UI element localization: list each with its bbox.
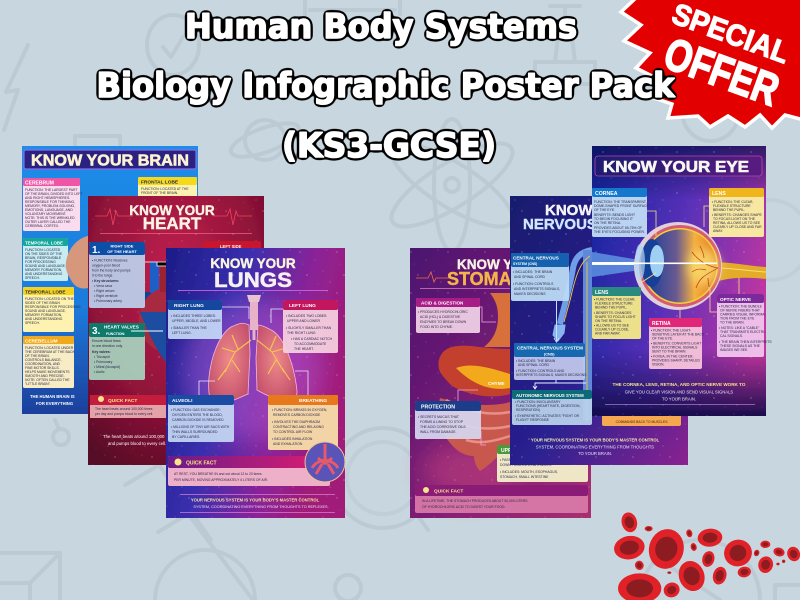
box: cerebrum <box>23 178 83 231</box>
lungs title <box>178 256 328 292</box>
box: cerebrum: NOTE: THIS IS THE WRINKLED <box>25 216 75 220</box>
quick fact: stomach <box>415 485 588 513</box>
box: central nervous system top: • INCLUDES: THE BRAIN <box>513 270 553 274</box>
box: upper digestive: • INCLUDES: MOUTH, ESOPHAGUS, <box>500 470 558 474</box>
box: frontal lobe: FUNCTION: LOCATED AT THE <box>141 187 189 191</box>
decoration: red blood cells <box>612 511 800 600</box>
box: breathing <box>268 395 338 450</box>
box: lens left: BEHIND THE PUPIL. <box>595 306 627 310</box>
box: temporal lobe teal: MEMORY FORMATION, <box>25 268 62 272</box>
heart quick fact: QUICK FACT <box>108 398 137 404</box>
box: autonomic nervous system: • SYMPATHETIC: ACTIVATES "FIGHT OR <box>515 414 580 418</box>
box: lens right: CLEARLY UP CLOSE AND FAR <box>713 225 762 229</box>
box: central nervous system top <box>511 253 569 301</box>
box: lens right: AWAY. <box>713 229 723 233</box>
box: right side of the heart: • Vena cava <box>94 284 112 288</box>
box: lens left: AND FAR AWAY. <box>595 332 621 336</box>
box: lens right: TO FOCUS LIGHT ON THE <box>713 217 756 221</box>
box: protection: • SECRETS MUCUS THAT <box>418 415 459 419</box>
box: right side of the heart: from the body and pumps <box>92 268 131 272</box>
box: autonomic nervous system: RESPIRATION) <box>516 408 540 412</box>
box: right lung: • SMALLER THAN THE <box>171 326 207 330</box>
box: cerebellum: CONTROLS BALANCE, <box>25 358 62 362</box>
box: heart valves: • Aortic <box>94 370 105 374</box>
box: temporal lobe teal <box>23 238 68 281</box>
box: optic nerve: OPTIC NERVE <box>720 297 751 302</box>
box: lens left <box>592 287 641 339</box>
box: alveoli: • MILLIONS OF TINY AIR SACS WITH <box>171 425 230 429</box>
box: cerebellum: FINE MOTOR SKILLS. <box>25 366 60 370</box>
box: cerebellum: "LITTLE BRAIN". <box>25 382 51 386</box>
box: lens right: • FUNCTION: THE CLEAR, <box>712 200 753 204</box>
box: acid and digestion: ACID & DIGESTION <box>421 300 464 306</box>
stomach illustration <box>438 293 510 471</box>
box: temporal lobe yellow: FUNCTION: LOCATED ON THE <box>25 297 75 301</box>
box: protection: THE ACID CORROSIVE OILS <box>420 425 466 429</box>
box: cornea: FUNCTION: THE TRANSPARENT, <box>594 200 647 204</box>
box: central nervous system lower: INTERPRETS SIGNALS, MAKES DECISIONS <box>516 373 587 377</box>
box: upper digestive: DOWN FOOD INTO NUTRIENTS. <box>500 463 552 467</box>
box: alveoli: CARBON DIOXIDE IS REMOVED <box>172 418 224 422</box>
eye title bar <box>595 156 762 176</box>
box: lens left: FLEXIBLE STRUCTURE <box>595 302 633 306</box>
box: temporal lobe yellow: MEMORY FORMATION, <box>25 313 62 317</box>
quick fact: stomach: OF HYDROCHLORIC ACID TO DIGEST YOUR FOOD. <box>422 505 505 509</box>
box: central nervous system top: CENTRAL NERVOUS <box>513 256 559 260</box>
box: central nervous system top: AND SPINAL CORD <box>514 275 546 279</box>
title line 2: Biology Infographic Poster Pack <box>96 66 676 106</box>
poster: know your lungs <box>166 248 345 518</box>
box: right side of the heart: RIGHT SIDE <box>111 244 134 248</box>
box: temporal lobe teal: BRAIN, RESPONSIBLE <box>25 256 62 260</box>
box: right lung: • INCLUDES THREE LOBES: <box>171 314 216 318</box>
box: right lung: UPPER, MIDDLE, AND LOWER <box>172 319 221 323</box>
box: optic nerve <box>717 294 772 357</box>
box: retina: PROVIDES SHARP, DETAILED <box>652 358 700 362</box>
box: optic nerve: CAL SIGNALS. <box>720 334 743 338</box>
box: retina: • BENEFITS: CONVERTS LIGHT <box>651 342 701 346</box>
box: temporal lobe yellow: RESPONSIBLE FOR PROCESSING <box>25 305 81 309</box>
nervous title <box>523 202 663 233</box>
box: temporal lobe teal: SPEECH. <box>25 276 40 280</box>
lungs title: LUNGS <box>214 269 292 292</box>
box: left lung: THE RIGHT LUNG <box>287 331 316 335</box>
box: optic nerve: TION FROM THE EYE <box>720 316 755 320</box>
box: retina: SENT TO THE BRAIN. <box>652 350 686 354</box>
nervous footer text: TO YOUR BRAIN. <box>578 451 612 456</box>
box: central nervous system top: MAKES DECISIONS <box>514 292 546 296</box>
box: left lung: • HAS A CARDIAC NOTCH <box>291 337 333 341</box>
box: cerebrum: CEREBRUM <box>25 180 54 186</box>
box: retina: • FUNCTION: THE LIGHT- <box>651 328 691 332</box>
nervous title: NERVOUS SYSTEM <box>523 216 663 233</box>
box: optic nerve: THESE SIGNALS AS THE <box>720 344 761 348</box>
nervous footer text: SYSTEM, COORDINATING EVERYTHING FROM THOUGHTS <box>536 444 654 450</box>
box: lens right: FLEXIBLE STRUCTURE <box>713 204 751 208</box>
box: left lung <box>283 300 338 353</box>
box: breathing: CONTRACTING AND RELAXING <box>273 425 324 429</box>
heart quick fact <box>90 395 262 418</box>
box: heart valves: 3. <box>92 326 101 337</box>
box: temporal lobe yellow: SIDES OF THE BRAIN <box>25 301 60 305</box>
box: upper digestive <box>497 445 588 482</box>
badge: special offer <box>621 0 800 128</box>
box: cerebrum: CEREBRAL CORTEX. <box>25 224 59 228</box>
box: right side of the heart: • FUNCTION: Receives <box>92 258 128 262</box>
quick fact: lungs: QUICK FACT <box>186 460 217 466</box>
box: central nervous system top: AND INTERPRETS SIGNALS, <box>514 287 560 291</box>
box: lens left: • FUNCTION: THE CLEAR, <box>594 298 635 302</box>
box: central nervous system lower: • INCLUDES: THE BRAIN <box>516 359 556 363</box>
box: right side of the heart: • Right ventricle <box>94 294 118 298</box>
nervous title: KNOW YOUR <box>545 202 640 219</box>
quick fact: lungs: PER MINUTE, MOVING APPROXIMATELY 6 LITERS OF AIR. <box>174 478 268 482</box>
quick fact: lungs <box>168 456 330 486</box>
heart quick fact: The heart beats around 100,000 times <box>95 407 153 411</box>
box: right side of the heart: • Key structures: <box>92 279 119 283</box>
box: upper digestive: STOMACH, SMALL INTESTINE <box>500 475 549 479</box>
box: optic nerve: • NOTES: LIKE A "CABLE" <box>719 326 760 330</box>
box: cornea: DOME-SHAPED FRONT SURFACE <box>594 204 649 208</box>
box: acid and digestion: FOOD INTO CHYME. <box>420 325 453 329</box>
box: autonomic nervous system <box>512 390 592 425</box>
connector lines <box>199 307 308 395</box>
box: breathing: BREATHING <box>299 398 327 404</box>
box: central nervous system lower <box>514 343 587 380</box>
heart footer text: and pumps blood to every cell. <box>108 441 166 446</box>
stomach title: KNOW YOUR <box>457 257 543 272</box>
box: central nervous system top: SYSTEM (CNS) <box>513 262 537 266</box>
box: cerebrum: OF THE BRAIN, DIVIDED INTO LEFT <box>25 192 83 196</box>
brain title bar: KNOW YOUR BRAIN <box>31 152 189 170</box>
box: optic nerve: THAT TRANSMITS ELECTRI- <box>720 330 765 334</box>
nervous body figure <box>553 250 592 422</box>
box: cerebellum: COORDINATION, AND <box>25 362 61 366</box>
box: heart valves: Ensure blood flows <box>92 339 121 343</box>
box: right side of the heart: OF THE HEART <box>107 249 137 254</box>
box: temporal lobe teal: AND UNDERSTANDING <box>25 272 63 276</box>
box: optic nerve: IMAGES WE SEE. <box>720 348 748 352</box>
box: cornea: CORNEA <box>595 191 618 197</box>
box: acid and digestion <box>416 298 480 333</box>
box: lens left: SHAPE TO FOCUS LIGHT <box>595 315 636 319</box>
box: cerebrum: MEMORY, PROBLEM-SOLVING, <box>25 204 75 208</box>
box: heart valves: FUNCTION: <box>106 332 125 336</box>
box: right lung <box>168 300 222 339</box>
box: optic nerve: CARRIES VISUAL INFORMA- <box>720 312 766 316</box>
box: heart valves: • Tricuspid <box>94 355 110 359</box>
box: right side of the heart <box>89 242 145 308</box>
poster: know your nervous system <box>510 196 688 465</box>
box: cornea: TO BEGIN FOCUSING IT <box>594 217 633 221</box>
box: heart valves: Key valves: <box>92 350 111 354</box>
poster: know your eye <box>592 146 772 416</box>
box: temporal lobe teal: ON THE SIDES OF THE <box>25 252 63 256</box>
box: retina: • FOVEA, IN THE CENTER, <box>651 354 693 358</box>
box: central nervous system lower: AND SPINAL CORD <box>518 363 550 367</box>
box: lens left: CLEARLY UP CLOSE, <box>595 328 629 332</box>
box: heart valves <box>89 323 145 380</box>
stomach title <box>416 257 543 289</box>
box: right lung: RIGHT LUNG <box>174 303 204 309</box>
box: retina: VISION. <box>652 362 664 366</box>
box: breathing: • INVOLVES THE DIAPHRAGM <box>272 420 320 424</box>
box: retina: RETINA <box>652 321 671 327</box>
box: lens right: LENS <box>712 191 726 197</box>
title line 1: Human Body Systems <box>185 7 577 47</box>
box: left side header: LEFT SIDE <box>220 244 242 249</box>
heart title <box>95 203 252 234</box>
box: left lung: THE HEART. <box>294 347 314 351</box>
box: central nervous system top: • FUNCTION: CONTROLS <box>513 282 554 286</box>
box: cerebellum: OF THE BRAIN. <box>25 354 50 358</box>
box: breathing: • INCLUDES INHALATION <box>272 437 313 441</box>
box: central nervous system lower: (CNS) <box>544 352 555 356</box>
box: protection: PROTECTION <box>421 404 455 410</box>
box: acid and digestion: ACID (HCL) & DIGESTIVE <box>420 315 461 319</box>
heart illustration <box>139 262 195 364</box>
box: cornea: ON THE RETINA. <box>594 221 621 225</box>
box: temporal lobe teal: TEMPORAL LOBE <box>25 240 63 246</box>
box: frontal lobe <box>138 177 197 197</box>
box: autonomic nervous system: AUTONOMIC NERVOUS SYSTEM <box>516 393 584 398</box>
box: cerebrum: VOLUNTARY MOVEMENT. <box>25 212 67 216</box>
box: cornea <box>592 188 649 237</box>
box: cornea: BENEFITS: BENDS LIGHT <box>594 213 635 217</box>
brain footer text <box>30 394 75 406</box>
box: protection: FORMS A LINING TO STOP <box>420 420 464 424</box>
box: protection: WALL FROM DAMAGE. <box>420 430 457 434</box>
box: retina: INTO ELECTRICAL SIGNALS <box>652 346 698 350</box>
box: retina: OF THE EYE. <box>652 336 673 340</box>
box: cerebrum: FUNCTION: THE LARGEST PART <box>25 188 78 192</box>
box: lens right: BEHIND THE PUPIL. <box>713 208 745 212</box>
box: frontal lobe: FRONT OF THE BRAIN. <box>141 191 178 195</box>
box: cerebrum: RESPONSIBLE FOR THINKING, <box>25 200 75 204</box>
box: frontal lobe: FRONTAL LOBE <box>141 180 179 186</box>
lungs illustration <box>209 295 297 403</box>
nervous footer text: YOUR NERVOUS SYSTEM IS YOUR BODY'S MASTER CONTROL <box>531 438 660 442</box>
box: retina <box>649 318 705 369</box>
box: temporal lobe yellow: TEMPORAL LOBE <box>25 290 66 294</box>
box: lens left: LENS <box>595 290 609 296</box>
box: heart valves: • Pulmonary <box>94 360 113 364</box>
stomach title: STOMACH <box>447 269 538 289</box>
box: acid and digestion: • PRODUCES HYDROCHLORIC <box>418 310 468 314</box>
eye footer text: GIVE YOU CLEAR VISION AND SEND VISUAL SIGNALS <box>625 390 733 394</box>
box: right side of the heart: oxygen-poor blood <box>92 264 120 268</box>
brain illustration <box>66 236 88 289</box>
connector lines <box>458 307 496 445</box>
box: temporal lobe yellow: SPEECH. <box>25 321 40 325</box>
box: temporal lobe yellow <box>23 287 81 332</box>
box: breathing: TO CONTROL AIR FLOW <box>273 430 313 434</box>
box: temporal lobe teal: SOUND AND LANGUAGE, <box>25 264 66 268</box>
box: motor output <box>602 410 681 426</box>
eye footer text <box>605 382 755 405</box>
heart title: HEART <box>143 214 202 233</box>
box: left lung: • SLIGHTLY SMALLER THAN <box>286 326 332 330</box>
box: temporal lobe teal: FOR PROCESSING <box>25 260 56 264</box>
poster: know your brain <box>22 146 198 414</box>
box: upper digestive: UPPER DIGESTIVE <box>501 448 547 454</box>
box: alveoli: ALVEOLI <box>172 398 193 404</box>
lungs footer text: YOUR NERVOUS SYSTEM IS YOUR BODY'S MASTER CONTROL <box>191 498 320 502</box>
box: cerebrum: OUTER LAYER CALLED THE <box>25 220 71 224</box>
arrow: down to central nervous <box>554 301 559 342</box>
box: right lung: LEFT LUNG. <box>172 331 192 335</box>
box: optic nerve: OF NERVE FIBERS THAT <box>720 308 760 312</box>
box: cornea: OF THE EYE. <box>594 208 615 212</box>
box: cerebellum: FUNCTION: LOCATED UNDER <box>25 346 74 350</box>
box: optic nerve: • THE BRAIN THEN INTERPRETS <box>719 340 772 344</box>
eye title bar: KNOW YOUR EYE <box>603 159 749 176</box>
box: left side header <box>203 241 261 251</box>
box: central nervous system lower: • FUNCTION: CONTROLS AND <box>516 369 565 373</box>
box: retina: SENSITIVE LAYER AT THE BACK <box>652 332 705 336</box>
box: right side of the heart: • Right atrium <box>94 289 115 293</box>
poster: know your stomach <box>410 248 591 518</box>
box: alveoli: • FUNCTION: GAS EXCHANGE: <box>171 408 221 412</box>
box: cerebellum: SMOOTH AND PRECISE. <box>25 374 65 378</box>
box: right side of the heart: it to the lungs. <box>92 274 113 278</box>
heart footer text: The heart beats around 100,000 <box>103 434 165 439</box>
quick fact: stomach: QUICK FACT <box>434 488 463 494</box>
box: breathing: REMOVES CARBON DIOXIDE <box>273 413 321 417</box>
stomach illustration: CHYME <box>488 381 505 386</box>
box: cerebellum <box>23 336 75 388</box>
box: cerebrum: AND RIGHT HEMISPHERES. <box>25 196 70 200</box>
box: cerebellum: THE CEREBRUM AT THE BACK <box>25 350 75 354</box>
box: upper digestive: • PASSES AND BREAKS <box>500 458 539 462</box>
box: left lung: UPPER AND LOWER <box>287 319 321 323</box>
box: right side of the heart: • Pulmonary artery <box>94 299 122 303</box>
brain footer text: THE HUMAN BRAIN IS <box>30 394 75 399</box>
eye illustration <box>592 222 766 310</box>
alveoli inset circle <box>305 442 345 482</box>
box: autonomic nervous system: • FUNCTION: INVOLUNTARY <box>515 400 561 404</box>
box: cerebrum: EMOTIONS, LANGUAGE, AND <box>25 208 73 212</box>
box: heart valves: HEART VALVES <box>104 324 139 330</box>
box: alveoli: THIN WALLS SURROUNDED <box>172 430 218 434</box>
box: left lung: • INCLUDES TWO LOBES: <box>286 314 327 318</box>
box: lens left: • ALLOWS US TO SEE <box>594 324 630 328</box>
lungs footer text: SYSTEM, COORDINATING EVERYTHING FROM THOUGHTS TO REFLEXES. <box>193 505 329 509</box>
heart footer text <box>103 434 166 446</box>
box: temporal lobe teal: FUNCTION: LOCATED <box>25 248 61 252</box>
box: lens right: • BENEFITS: CHANGES SHAPE <box>712 213 763 217</box>
lungs footer text <box>180 494 335 513</box>
title line 3: (KS3-GCSE) <box>282 126 496 166</box>
box: alveoli <box>168 395 234 442</box>
box: lens right: RETINA, ALLOWS US TO SEE <box>713 221 761 225</box>
box: protection <box>415 401 481 439</box>
box: cornea: THE EYE'S FOCUSING POWER. <box>594 230 645 234</box>
box: autonomic nervous system: FUNCTIONS (HEART RATE, DIGESTION, <box>516 404 580 408</box>
quick fact: stomach: IN A LIFETIME, THE STOMACH PRODUCES ABOUT 50,000 LITERS <box>422 499 528 503</box>
box: optic nerve: • FUNCTION: THE BUNDLE <box>719 304 763 308</box>
box: left lung: LEFT LUNG <box>289 303 316 309</box>
box: cornea: PROVIDES ABOUT 65-75% OF <box>594 226 642 230</box>
box: heart valves: • Mitral (bicuspid) <box>94 365 120 369</box>
box: lens left: • BENEFITS: CHANGES <box>594 311 632 315</box>
eye footer text: TO YOUR BRAIN. <box>662 396 696 402</box>
box: autonomic nervous system: FLIGHT" RESPONSE <box>516 418 550 422</box>
box: left lung: TO ACCOMMODATE <box>294 342 327 346</box>
box: temporal lobe yellow: AND UNDERSTANDING <box>25 317 63 321</box>
box: heart valves: in one direction only. <box>92 344 123 348</box>
box: optic nerve: TO THE BRAIN. <box>720 320 745 324</box>
arrow: down to autonomic <box>533 380 586 389</box>
box: cerebellum: NOTE: OFTEN CALLED THE <box>25 378 70 382</box>
brain footer text: FOR EVERYTHING <box>36 401 73 406</box>
box: acid and digestion: ENZYMES TO BREAK DOWN <box>420 320 467 324</box>
box: central nervous system lower: CENTRAL NERVOUS SYSTEM <box>517 346 583 350</box>
box: breathing: • FUNCTION: BRINGS IN OXYGEN, <box>272 408 327 412</box>
box: lens left: ON THE RETINA. <box>595 319 622 323</box>
eye footer text: THE CORNEA, LENS, RETINA, AND OPTIC NERVE WORK TO <box>613 382 746 387</box>
heart quick fact: per day and pumps blood to every cell. <box>95 412 153 416</box>
quick fact: lungs: AT REST, YOU BREATHE IN and out about 12 to 20 times <box>174 472 262 476</box>
arrow: heart valves <box>131 330 163 332</box>
box: cerebellum: HELPS MAKE MOVEMENTS <box>25 370 70 374</box>
box: alveoli: BY CAPILLARIES. <box>172 435 200 439</box>
box: alveoli: OXYGEN ENTERS THE BLOOD, <box>172 413 223 417</box>
box: temporal lobe yellow: SOUND AND LANGUAGE, <box>25 309 66 313</box>
box: lens right <box>709 188 764 237</box>
poster: know your heart <box>88 196 264 465</box>
box: motor output: COMMANDS BACK TO MUSCLES. <box>616 420 668 424</box>
connector lines <box>642 206 709 318</box>
lungs title: KNOW YOUR <box>210 256 296 271</box>
heart title: KNOW YOUR <box>129 203 215 218</box>
nervous footer text <box>531 438 660 456</box>
box: breathing: AND EXHALATION <box>273 442 303 446</box>
box: right side of the heart: 1. <box>92 245 101 256</box>
box: cerebellum: CEREBELLUM <box>25 338 58 344</box>
